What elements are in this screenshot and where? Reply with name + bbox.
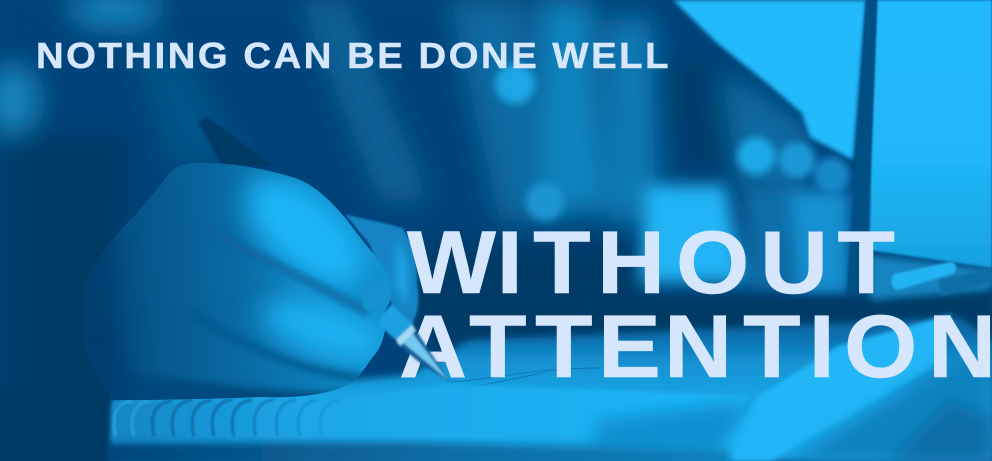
bright screen — [868, 0, 992, 268]
lower palm shade — [135, 376, 339, 400]
middle finger behind — [345, 214, 418, 325]
laptop bezel — [846, 0, 877, 300]
right table shade — [790, 345, 992, 461]
thumbnail — [362, 282, 390, 310]
crease lower — [190, 312, 362, 378]
bokeh spots — [495, 64, 850, 221]
heading: without: WITHOUT — [407, 213, 895, 312]
pen back end — [198, 117, 272, 166]
laptop light bar — [891, 262, 956, 290]
pen — [378, 304, 450, 382]
hand shape — [83, 162, 392, 400]
paper — [110, 318, 992, 461]
lower finger highlight — [250, 284, 385, 372]
handwriting — [450, 368, 600, 388]
index finger highlight — [230, 168, 374, 294]
bottom dark shade — [105, 442, 730, 461]
heading: attention: ATTENTION — [399, 297, 992, 396]
spiral binding — [114, 400, 340, 436]
screen lower shade — [870, 255, 992, 300]
heading: nothing can be done well: NOTHING CAN BE DONE WELL — [36, 35, 671, 76]
dark laptop base — [590, 285, 992, 340]
hand holding pen — [60, 117, 418, 410]
bright room behind — [673, 0, 866, 160]
notebook edge — [112, 384, 750, 440]
keyboard strip — [938, 268, 992, 296]
blurred objects behind text — [420, 185, 850, 340]
crease upper — [234, 243, 370, 318]
bright notebook wedge — [700, 314, 952, 461]
